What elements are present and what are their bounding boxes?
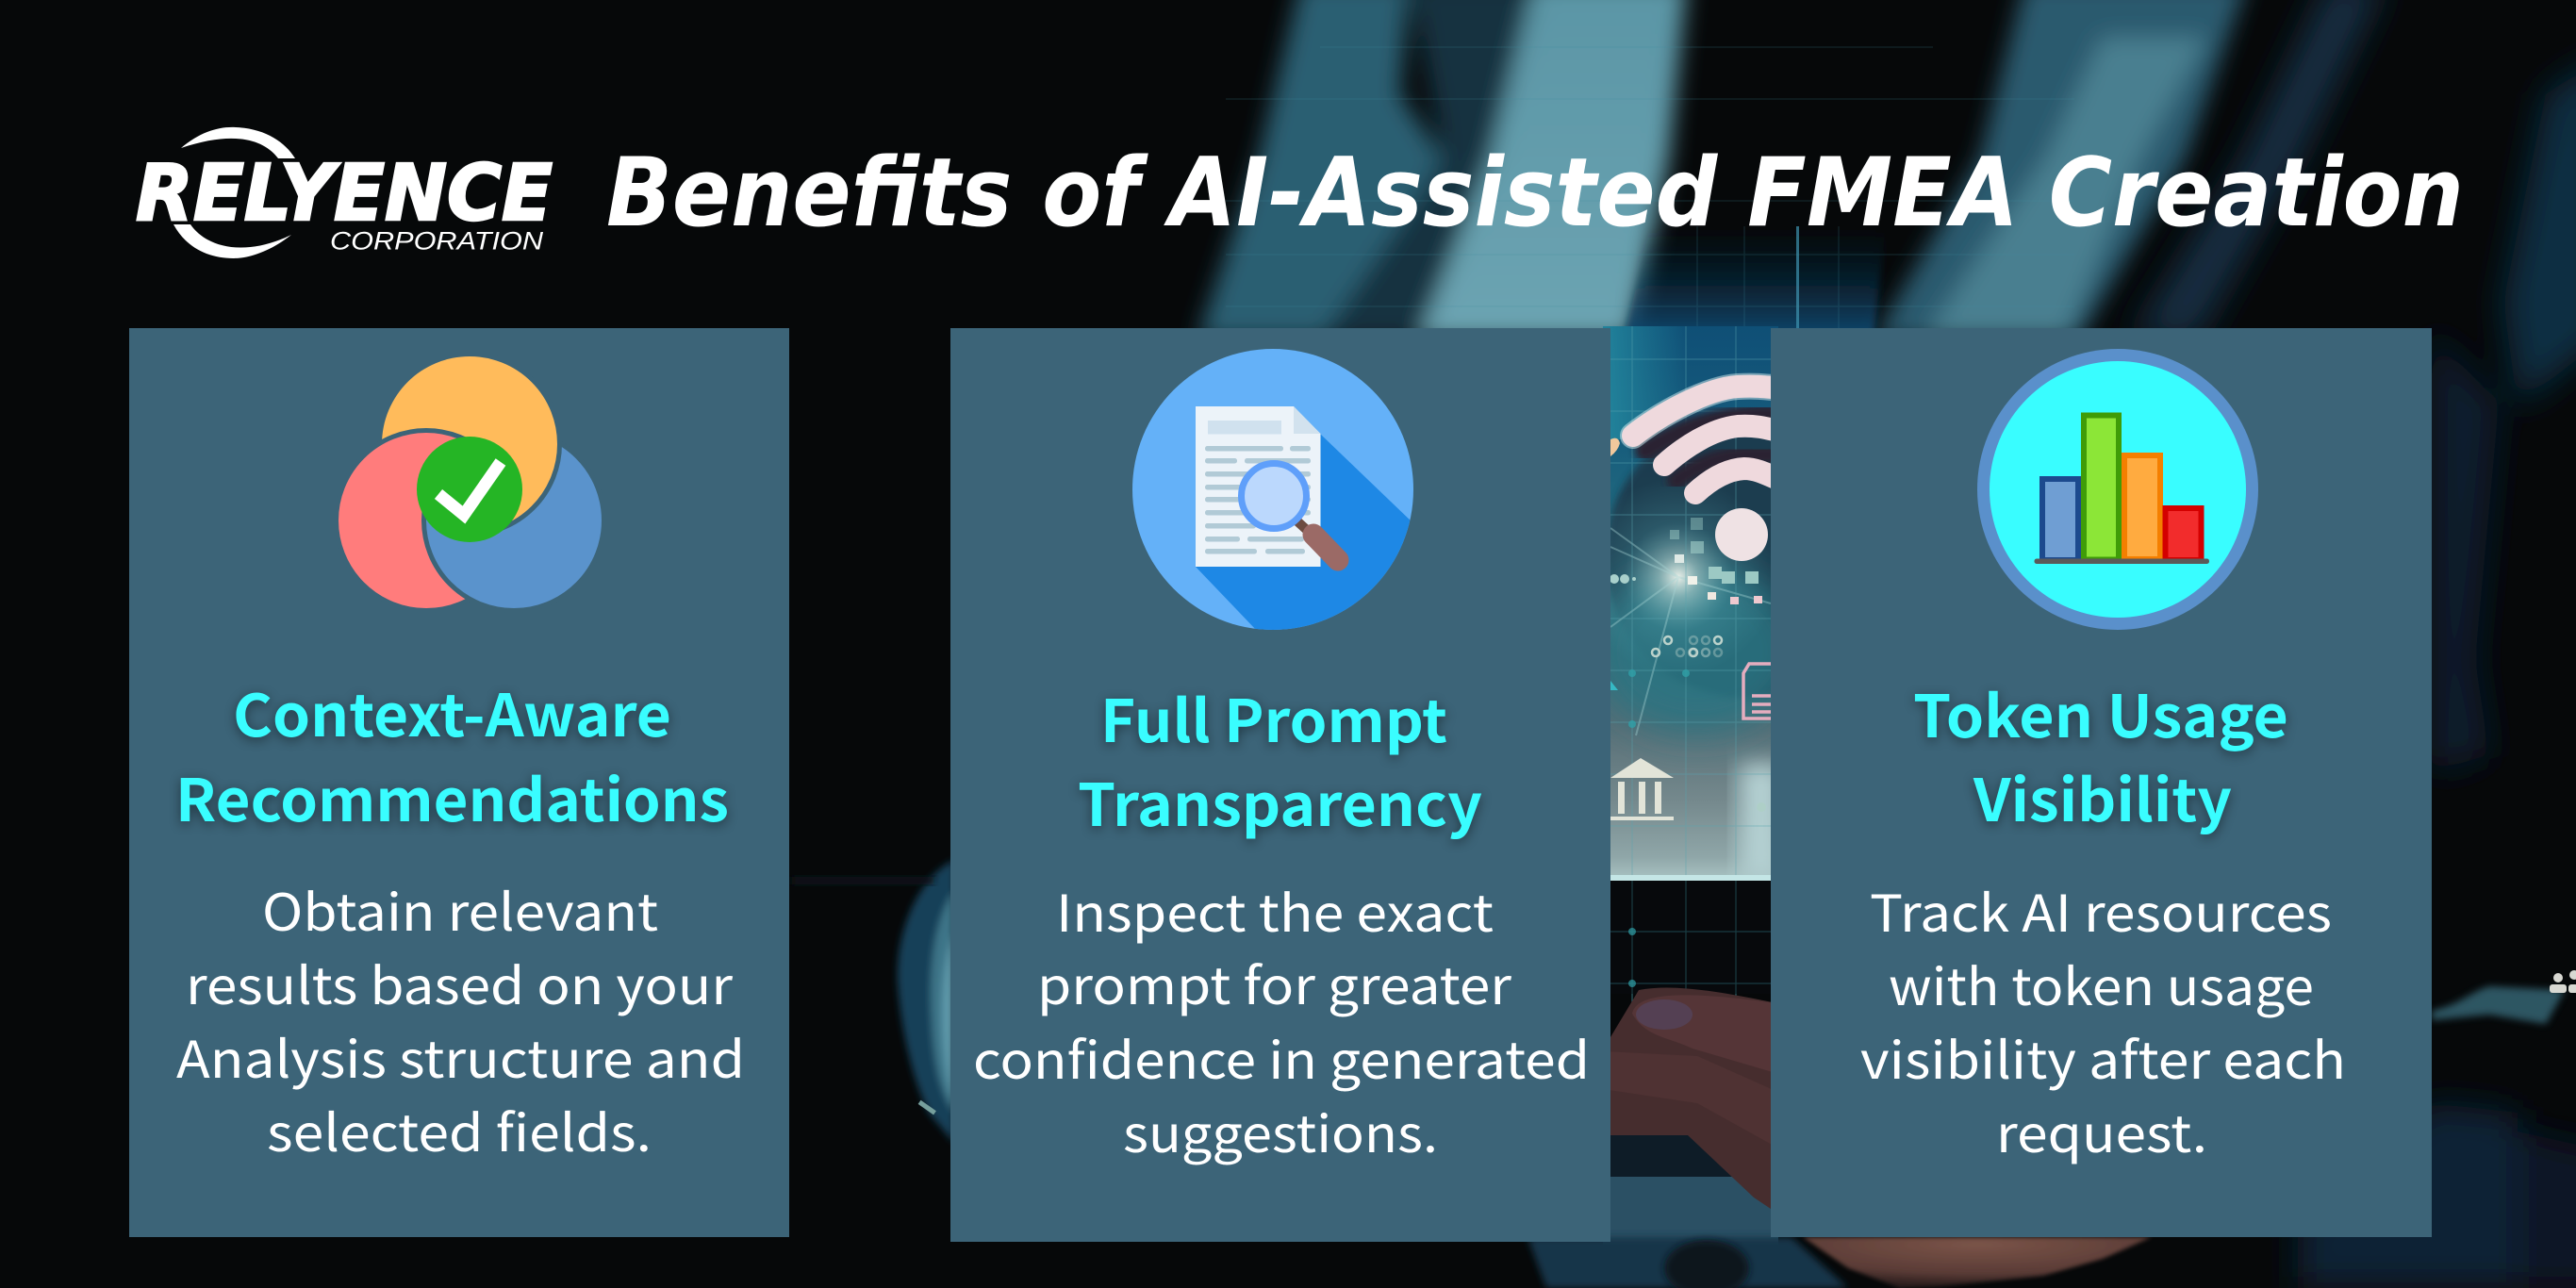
hand fingers: [1603, 988, 1782, 1251]
logo: Relyence Corporation: [136, 127, 553, 258]
body text: Analysis structure and: [176, 1018, 745, 1093]
logo wordmark: RELYENCE: [136, 149, 553, 239]
body text: Obtain relevant: [262, 871, 658, 946]
body text: [973, 872, 1590, 1167]
background: dark photo of person holding tablet: [796, 0, 2576, 1288]
body text: [176, 871, 745, 1166]
heading: Full Prompt: [1100, 674, 1447, 759]
heading: Context-Aware: [233, 669, 671, 753]
panel: full prompt transparency: [950, 328, 1610, 1242]
panel background: [129, 328, 789, 1237]
body text: Track AI resources: [1870, 872, 2332, 947]
body text: with token usage: [1889, 946, 2314, 1020]
logo bottom swoosh: [173, 224, 291, 258]
body text: prompt for greater: [1037, 945, 1512, 1019]
panel background: [1771, 328, 2432, 1237]
right shoulder highlight and people icon: [2432, 970, 2576, 1024]
icon: wifi symbol: [1633, 387, 1792, 493]
icon: overlapping circles with check: [336, 355, 603, 611]
sleeve: [898, 860, 954, 1143]
body text: confidence in generated: [973, 1019, 1590, 1094]
panel: context-aware recommendations: [129, 328, 789, 1237]
heading: [1913, 669, 2288, 838]
icon: bank: [1610, 758, 1674, 820]
body text: visibility after each: [1860, 1019, 2346, 1094]
heading: Token Usage: [1913, 669, 2288, 754]
bottom strip of shirt and hand: [1527, 1237, 2152, 1288]
icon: bar chart: [1977, 349, 2258, 630]
heading: Recommendations: [175, 753, 729, 838]
heading: Transparency: [1078, 758, 1482, 843]
tablet screen: [1603, 326, 1778, 1242]
heading: [1078, 674, 1482, 843]
body text: selected fields.: [267, 1092, 652, 1166]
body text: [1860, 872, 2346, 1167]
panel background: [950, 328, 1610, 1242]
body text: suggestions.: [1123, 1093, 1438, 1167]
body text: request.: [1996, 1093, 2207, 1167]
body text: Inspect the exact: [1056, 872, 1494, 947]
logo subtitle: CORPORATION: [330, 226, 544, 255]
faint grid lines: [1226, 47, 2074, 330]
icon: document with magnifier: [1132, 349, 1414, 632]
panel: token usage visibility: [1771, 328, 2432, 1237]
heading: [175, 669, 729, 838]
logo top swoosh: [181, 127, 295, 158]
dots rows: [1652, 636, 1722, 656]
heading: Visibility: [1973, 753, 2232, 838]
body text: results based on your: [186, 945, 734, 1019]
icon: document outline: [1743, 664, 1777, 718]
data squares: [1670, 518, 1762, 604]
